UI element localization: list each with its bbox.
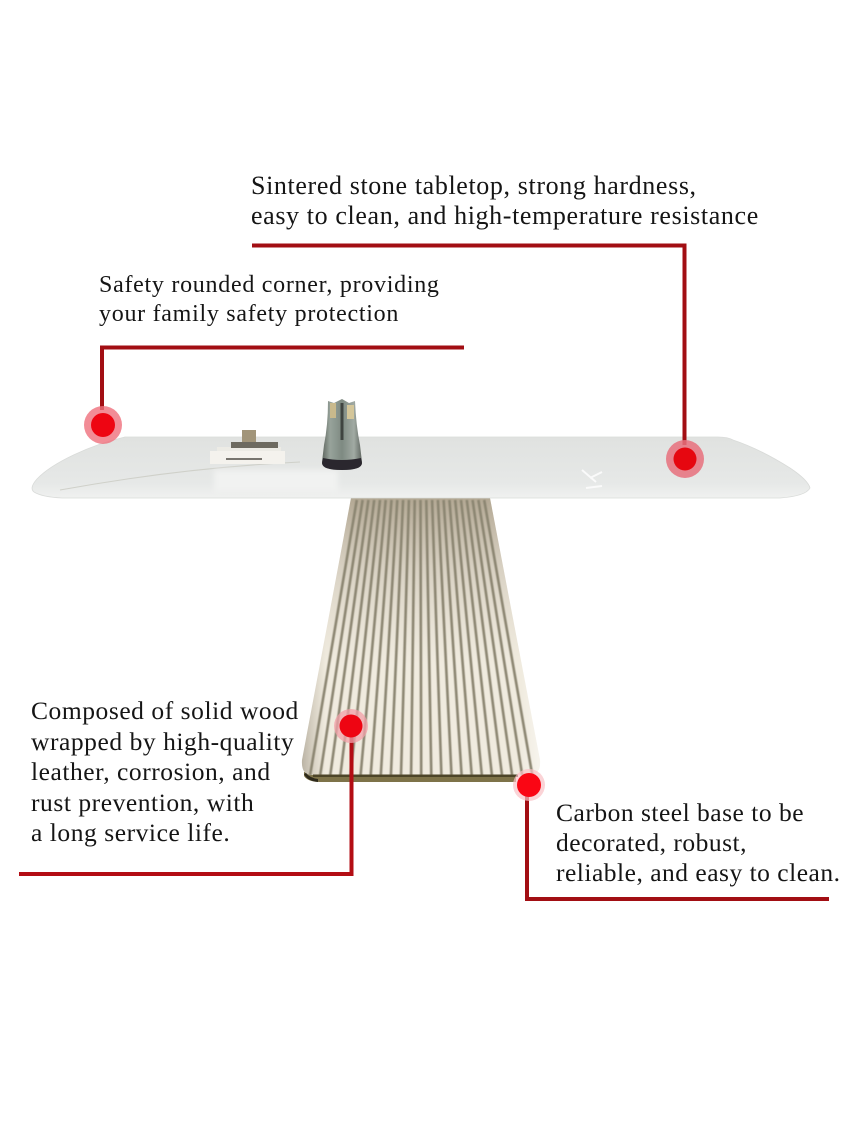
vase: [322, 399, 362, 470]
text: carbon steel base: Carbon steel base to be: [556, 798, 804, 827]
text: solid wood and leather: a long service life.: [31, 818, 230, 847]
marker: tabletop: [666, 440, 704, 478]
marker: rounded corner: [84, 406, 122, 444]
callout line: rounded corner: [102, 348, 464, 410]
pedestal ribs: [310, 500, 532, 775]
callout line: leather: [19, 735, 352, 874]
text: safety rounded corner: Safety rounded corner, providing: [99, 272, 440, 298]
books on table: [210, 430, 285, 464]
text: solid wood and leather: [31, 696, 299, 847]
callout line: tabletop: [252, 246, 684, 445]
text: solid wood and leather: leather, corrosion, and: [31, 757, 271, 786]
text: safety rounded corner: your family safety protection: [99, 301, 399, 327]
text: sintered stone tabletop: Sintered stone tabletop, strong hardness,: [251, 171, 697, 200]
text: solid wood and leather: rust prevention, with: [31, 788, 254, 816]
text: solid wood and leather: Composed of solid wood: [31, 696, 299, 725]
pedestal base: [302, 498, 540, 782]
text: sintered stone tabletop: [251, 171, 759, 230]
text: carbon steel base: [556, 798, 840, 887]
marker: carbon steel: [513, 769, 545, 801]
tabletop: [32, 437, 810, 498]
text: carbon steel base: decorated, robust,: [556, 828, 747, 857]
marker: leather: [334, 709, 368, 743]
text: safety rounded corner: [99, 272, 440, 327]
text: carbon steel base: reliable, and easy to clean.: [556, 858, 840, 887]
callout line: carbon steel: [527, 795, 829, 899]
text: sintered stone tabletop: easy to clean, and high-temperature resistance: [251, 201, 759, 230]
text: solid wood and leather: wrapped by high-quality: [31, 726, 294, 756]
